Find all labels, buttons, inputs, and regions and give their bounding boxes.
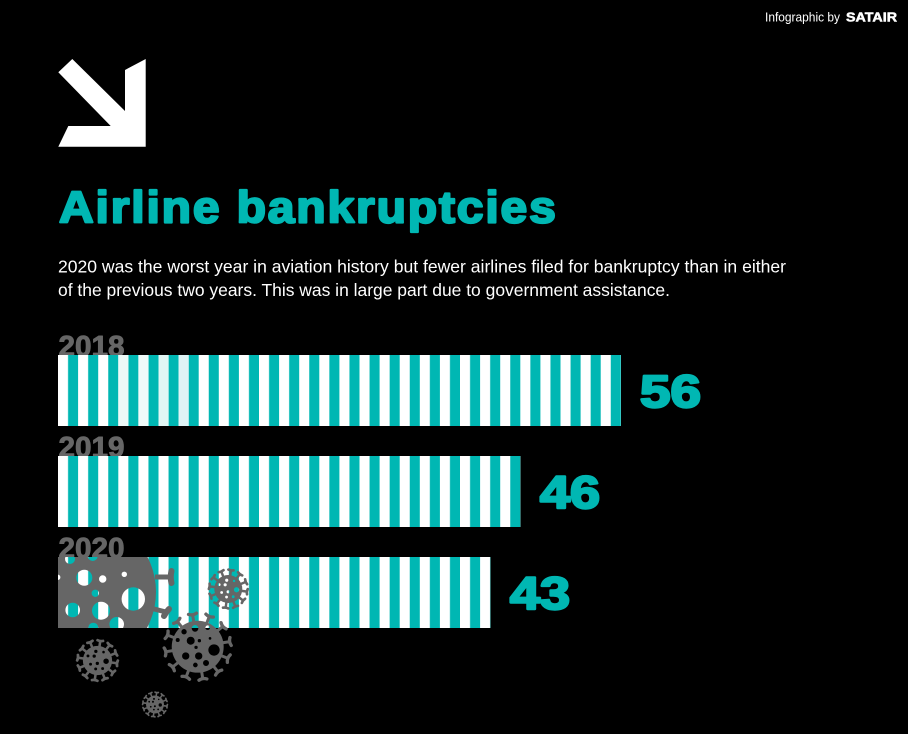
icon: down-right arrow bbox=[58, 59, 146, 147]
credit: Infographic by Satair: SATAIR bbox=[846, 10, 897, 24]
value 56: 56 bbox=[640, 366, 701, 417]
bar row: 2020, 43 bankruptcies bbox=[58, 533, 570, 628]
bar 2018 bbox=[58, 355, 621, 426]
intro text: 2020 was the worst year in aviation history but fewer airlines filed for bankruptcy than in either bbox=[58, 256, 786, 276]
title: Airline bankruptcies bbox=[59, 182, 556, 232]
year label 2019: 2019 bbox=[58, 432, 124, 464]
bar row: 2018, 56 bankruptcies bbox=[58, 331, 701, 426]
icon: tiny virus at the bottom bbox=[143, 692, 167, 717]
value 46: 46 bbox=[540, 467, 600, 518]
icon: medium virus below the 2020 bar bbox=[164, 613, 231, 680]
intro text bbox=[58, 256, 786, 300]
credit: Infographic by Satair: Infographic by bbox=[765, 10, 841, 24]
year label 2018: 2018 bbox=[58, 331, 124, 363]
icon: small virus lower left bbox=[77, 640, 118, 681]
value 43: 43 bbox=[510, 568, 570, 619]
bar 2019 bbox=[58, 456, 520, 527]
icon: small virus on the 2020 bar bbox=[209, 570, 248, 608]
bar row: 2019, 46 bankruptcies bbox=[58, 432, 600, 527]
intro text: of the previous two years. This was in large part due to government assistance. bbox=[58, 280, 670, 300]
year label 2020: 2020 bbox=[58, 533, 124, 565]
credit: Infographic by Satair bbox=[765, 10, 897, 24]
bar 2020 bbox=[58, 557, 490, 628]
icon: large virus cropped to the 2020 bar bbox=[58, 557, 174, 628]
